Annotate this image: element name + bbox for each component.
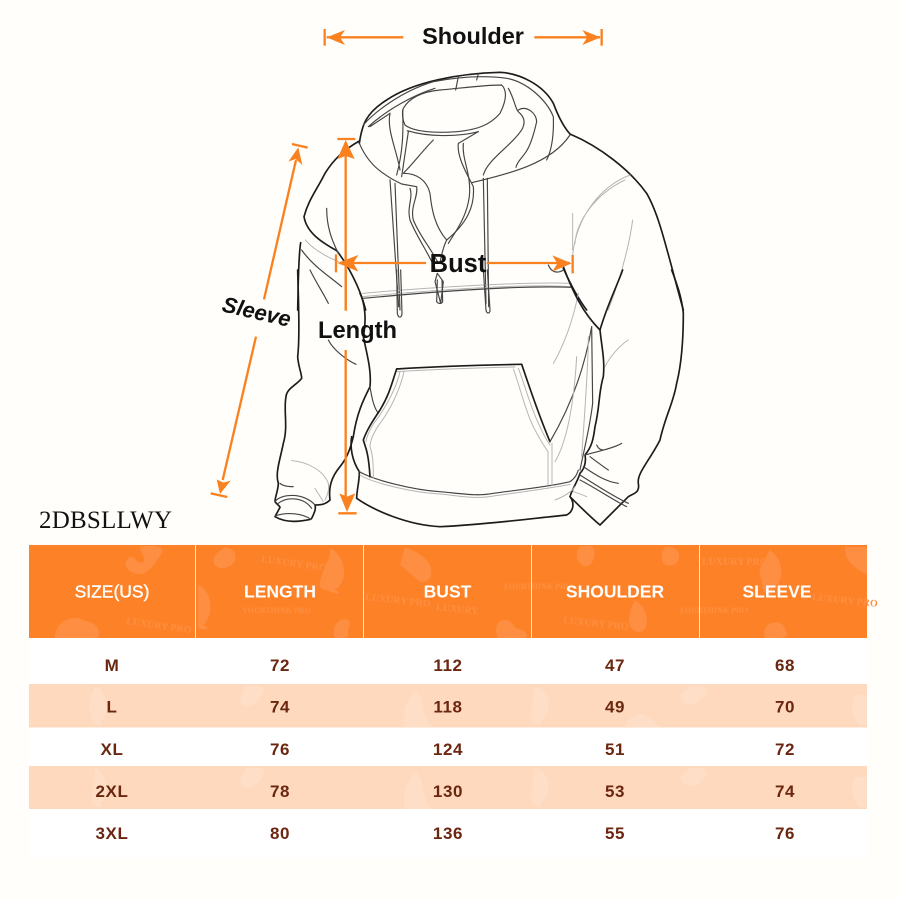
band watermark <box>89 685 867 809</box>
header watermark text: LUXURY <box>436 602 480 617</box>
label: Sleeve: Sleeve <box>220 292 293 332</box>
header watermark text: YOURTHINK PRO <box>242 606 311 615</box>
row L: 118 <box>433 698 463 716</box>
arrow: shoulder <box>325 29 602 46</box>
row 2XL: 2XL <box>96 782 128 801</box>
header column dividers <box>195 545 700 638</box>
header labels: SIZE(US) <box>75 582 149 602</box>
header watermark text <box>126 554 878 636</box>
table header <box>29 545 878 638</box>
row M: 47 <box>605 656 625 675</box>
row 2XL: 74 <box>775 782 795 801</box>
header labels: SHOULDER <box>566 582 664 602</box>
label: Bust: Bust <box>430 250 487 278</box>
row L: 70 <box>775 698 795 716</box>
row XL: XL <box>101 740 123 759</box>
header labels: SLEEVE <box>742 582 812 602</box>
header watermark text: LUXURY PRO <box>261 554 327 574</box>
row 3XL: 80 <box>270 824 290 843</box>
row XL <box>101 740 795 759</box>
table values <box>96 656 795 843</box>
arrow: sleeve lower <box>211 337 256 497</box>
header watermark text: LUXURY PRO <box>812 592 878 610</box>
row M: M <box>105 656 119 675</box>
header watermark text: LUXURY PRO <box>563 615 629 633</box>
row XL: 72 <box>775 740 795 759</box>
header watermark <box>55 546 867 638</box>
row 2XL <box>96 782 795 801</box>
label: Length: Length <box>318 318 397 344</box>
table row bands <box>29 684 867 809</box>
row L: L <box>107 698 117 716</box>
row XL: 124 <box>433 740 463 759</box>
header watermark text: YOURTHINK PRO <box>679 606 748 615</box>
arrow: bust <box>336 254 573 273</box>
header watermark text: LUXURY PRO <box>702 557 768 568</box>
hoodie upper part <box>298 72 683 310</box>
header watermark text: YOURTHINK PRO <box>503 582 572 591</box>
row 2XL: 78 <box>270 782 290 801</box>
row M: 112 <box>433 656 463 675</box>
header labels <box>75 582 812 602</box>
row L <box>107 698 795 716</box>
product code: 2DBSLLWY <box>39 507 172 534</box>
row 3XL: 76 <box>775 824 795 843</box>
row M: 72 <box>270 656 290 675</box>
hoodie lower part <box>275 267 683 527</box>
header watermark text: LUXURY PRO <box>365 592 431 610</box>
row L: 49 <box>605 698 625 716</box>
row 2XL: 53 <box>605 782 625 801</box>
row L: 74 <box>270 698 290 716</box>
label: Shoulder: Shoulder <box>422 23 524 49</box>
header labels: LENGTH <box>244 582 316 602</box>
row 3XL <box>96 824 795 843</box>
arrow: length <box>337 139 355 311</box>
row 3XL: 55 <box>605 824 625 843</box>
illustration: hoodie line drawing <box>211 23 683 527</box>
table body background <box>29 638 867 858</box>
arrow: length lower <box>338 270 357 513</box>
row M <box>105 656 795 675</box>
row M: 68 <box>775 656 795 675</box>
row 3XL: 136 <box>433 824 463 843</box>
row 2XL: 130 <box>433 782 463 801</box>
row XL: 76 <box>270 740 290 759</box>
header watermark text: LUXURY PRO <box>126 616 192 636</box>
table: size chart <box>29 545 878 858</box>
row XL: 51 <box>605 740 625 759</box>
row 3XL: 3XL <box>96 824 128 843</box>
arrow: sleeve upper <box>264 144 308 299</box>
header labels: BUST <box>424 582 472 602</box>
